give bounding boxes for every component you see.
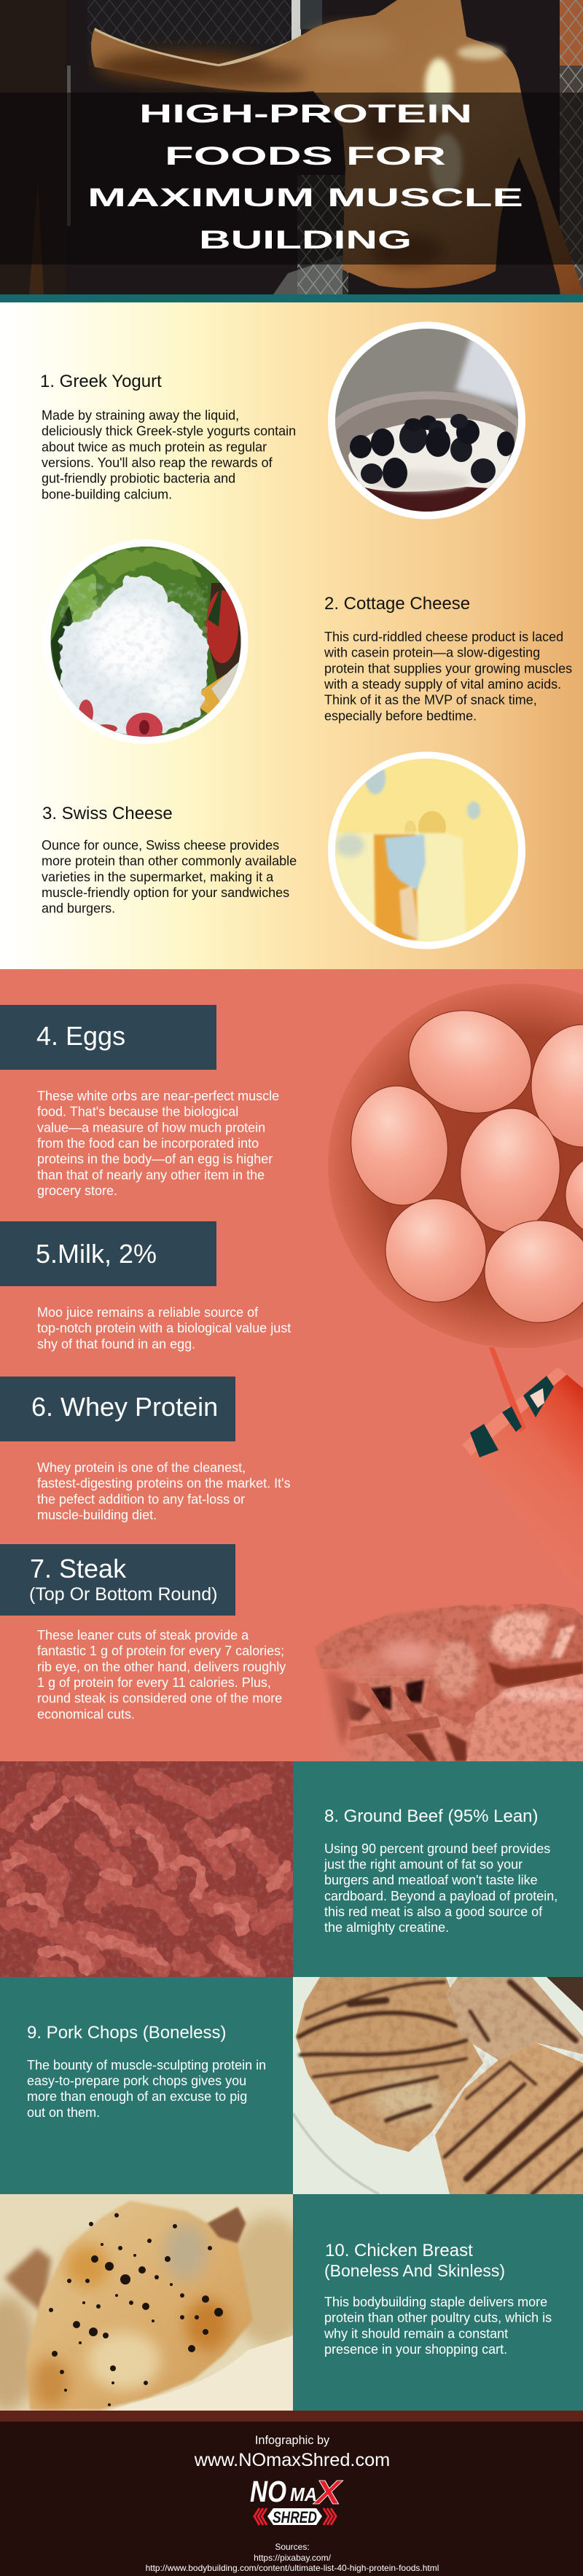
text: Steak: fantastic 1 g of protein for every 7 calories;	[37, 1644, 284, 1659]
text: Swiss Cheese: more protein than other commonly available	[42, 854, 297, 869]
panel: Ground Beef text: just the right amount of fat so your	[324, 1857, 523, 1872]
panel: header hero	[0, 0, 583, 294]
panel: Pork Chops text: more than enough of an excuse to pig	[27, 2089, 247, 2104]
sources: http://www.bodybuilding.com/content/ultimate-list-40-high-protein-foods.html	[146, 2563, 439, 2573]
credit line: Infographic by	[255, 2434, 330, 2447]
panel: Chicken Breast text: (Boneless And Skinless)	[324, 2261, 505, 2280]
sources	[146, 2542, 439, 2573]
title	[87, 100, 523, 254]
image: ground beef	[0, 1761, 293, 1977]
panel: Chicken Breast text: 10. Chicken Breast	[325, 2241, 473, 2260]
panel: Ground Beef text	[293, 1761, 583, 1977]
text: Steak: round steak is considered one of the more	[37, 1691, 282, 1706]
brown divider bar	[0, 2411, 583, 2422]
heading box: Milk	[0, 1221, 216, 1286]
text: Whey Protein: the pefect addition to any fat-loss or	[37, 1492, 245, 1506]
logo: NO MAX SHRED: X	[312, 2473, 343, 2511]
heading box: Eggs	[0, 1005, 216, 1070]
panel: dairy section	[0, 302, 583, 969]
text: Greek Yogurt: gut-friendly probiotic bacteria and	[42, 471, 235, 486]
website: www.NOmaxShred.com	[194, 2450, 390, 2470]
image: protein shake	[462, 1347, 583, 1597]
text: Milk: top-notch protein with a biological value just	[37, 1321, 291, 1336]
text: Milk: shy of that found in an egg.	[37, 1336, 195, 1351]
text: Greek Yogurt: bone-building calcium.	[42, 487, 172, 501]
text: Swiss Cheese: varieties in the supermarket, making it a	[42, 869, 274, 884]
dark title band	[0, 93, 583, 265]
text: Eggs: from the food can be incorporated into	[37, 1136, 259, 1151]
sources: https://pixabay.com/	[254, 2553, 332, 2563]
text: Cottage Cheese: with a steady supply of vital amino acids.	[324, 677, 561, 692]
heading box: Whey Protein	[0, 1377, 235, 1441]
logo: NO MAX SHRED: NO	[250, 2475, 286, 2508]
text: Whey Protein: Whey protein is one of the cleanest,	[37, 1460, 246, 1475]
text: Eggs: value—a measure of how much protein	[37, 1120, 265, 1135]
teal divider bar	[0, 294, 583, 302]
text: Cottage Cheese: with casein protein—a slow-digesting	[324, 646, 540, 660]
heading: Greek Yogurt: 1. Greek Yogurt	[40, 372, 162, 391]
panel: Ground Beef text: burgers and meatloaf won't taste like	[324, 1873, 538, 1887]
panel: Pork Chops text: The bounty of muscle-sculpting protein in	[27, 2058, 266, 2072]
panel: Ground Beef text: the almighty creatine.	[324, 1920, 449, 1935]
text: Steak: rib eye, on the other hand, delivers roughly	[37, 1659, 286, 1674]
text: Steak: economical cuts.	[37, 1707, 135, 1721]
panel: Pork Chops text: 9. Pork Chops (Boneless)	[27, 2023, 226, 2043]
panel: Pork Chops text: out on them.	[27, 2105, 100, 2120]
text: Cottage Cheese: This curd-riddled cheese product is laced	[324, 630, 563, 644]
panel: Chicken Breast text: why it should remain a constant	[324, 2326, 508, 2341]
image: chicken breast	[0, 2194, 313, 2412]
man torso	[91, 0, 583, 294]
panel: Chicken Breast text	[293, 2194, 583, 2411]
text: Swiss Cheese: muscle-friendly option for your sandwiches	[42, 885, 289, 900]
panel: Ground Beef text: 8. Ground Beef (95% Lean)	[324, 1806, 539, 1826]
text: Steak: 1 g of protein for every 11 calories. Plus,	[37, 1675, 271, 1690]
title: MAXIMUM MUSCLE	[87, 184, 523, 212]
panel: Pork Chops text: easy-to-prepare pork chops gives you	[27, 2074, 246, 2088]
heading: Cottage Cheese: 2. Cottage Cheese	[324, 594, 470, 614]
text: Eggs: than that of nearly any other item in the	[37, 1167, 265, 1182]
sources: Sources:	[275, 2542, 310, 2552]
image: yogurt with blueberries	[328, 322, 525, 519]
image: bowl of eggs	[328, 984, 583, 1348]
text: Swiss Cheese: and burgers.	[42, 901, 115, 916]
text: Eggs: These white orbs are near-perfect muscle	[37, 1089, 279, 1103]
panel: Chicken Breast text: protein than other poultry cuts, which is	[324, 2311, 552, 2325]
panel: footer	[0, 2422, 583, 2576]
text: Greek Yogurt: Made by straining away the liquid,	[42, 408, 239, 423]
heading box: Steak: 7. Steak	[30, 1554, 127, 1583]
panel: Ground Beef text: Using 90 percent ground beef provides	[324, 1841, 550, 1856]
text: Cottage Cheese: protein that supplies your growing muscles	[324, 661, 572, 676]
title: FOODS FOR	[165, 142, 446, 171]
text: Eggs: proteins in the body—of an egg is higher	[37, 1152, 273, 1167]
heading box: Steak	[0, 1544, 235, 1616]
text: Whey Protein: fastest-digesting proteins on the market. It's	[37, 1476, 291, 1491]
gym background	[0, 0, 583, 294]
panel: Chicken Breast text: This bodybuilding staple delivers more	[324, 2295, 547, 2309]
heading: Swiss Cheese: 3. Swiss Cheese	[42, 804, 173, 823]
panel: Chicken Breast text: presence in your shopping cart.	[324, 2342, 507, 2357]
logo: NO MAX SHRED: MA	[290, 2483, 317, 2505]
text: Swiss Cheese: Ounce for ounce, Swiss cheese provides	[42, 838, 279, 853]
image: cottage cheese	[44, 539, 248, 745]
text: Steak: These leaner cuts of steak provide a	[37, 1628, 249, 1643]
text: Greek Yogurt: about twice as much protein as regular	[42, 439, 267, 454]
text: Whey Protein: muscle-building diet.	[37, 1508, 157, 1522]
text: Cottage Cheese: Think of it as the MVP of snack time,	[324, 693, 537, 708]
text: Cottage Cheese: especially before bedtime.	[324, 708, 477, 723]
heading box: Eggs: 4. Eggs	[36, 1021, 125, 1051]
panel: Ground Beef text: this red meat is also a good source of	[324, 1904, 543, 1919]
image: swiss cheese	[328, 752, 525, 949]
panel: Ground Beef text: cardboard. Beyond a payload of protein,	[324, 1889, 557, 1903]
logo: NO MAX SHRED	[250, 2473, 343, 2526]
heading box: Whey Protein: 6. Whey Protein	[31, 1392, 218, 1422]
text: Greek Yogurt: versions. You'll also reap the rewards of	[42, 455, 273, 470]
image: pork chops	[293, 1977, 583, 2194]
title: HIGH-PROTEIN	[139, 100, 472, 128]
text: Milk: Moo juice remains a reliable source of	[37, 1305, 259, 1320]
panel: Pork Chops text	[0, 1977, 293, 2194]
panel: coral section	[0, 969, 583, 1761]
logo: NO MAX SHRED: SHRED	[273, 2508, 317, 2526]
heading box: Milk: 5.Milk, 2%	[36, 1239, 157, 1269]
text: Eggs: food. That's because the biological	[37, 1105, 238, 1119]
image: steak on grill	[312, 1603, 583, 1761]
heading box: Steak: (Top Or Bottom Round)	[29, 1584, 217, 1605]
title: BUILDING	[199, 226, 412, 254]
text: Greek Yogurt: deliciously thick Greek-style yogurts contain	[42, 424, 296, 439]
text: Eggs: grocery store.	[37, 1183, 117, 1198]
